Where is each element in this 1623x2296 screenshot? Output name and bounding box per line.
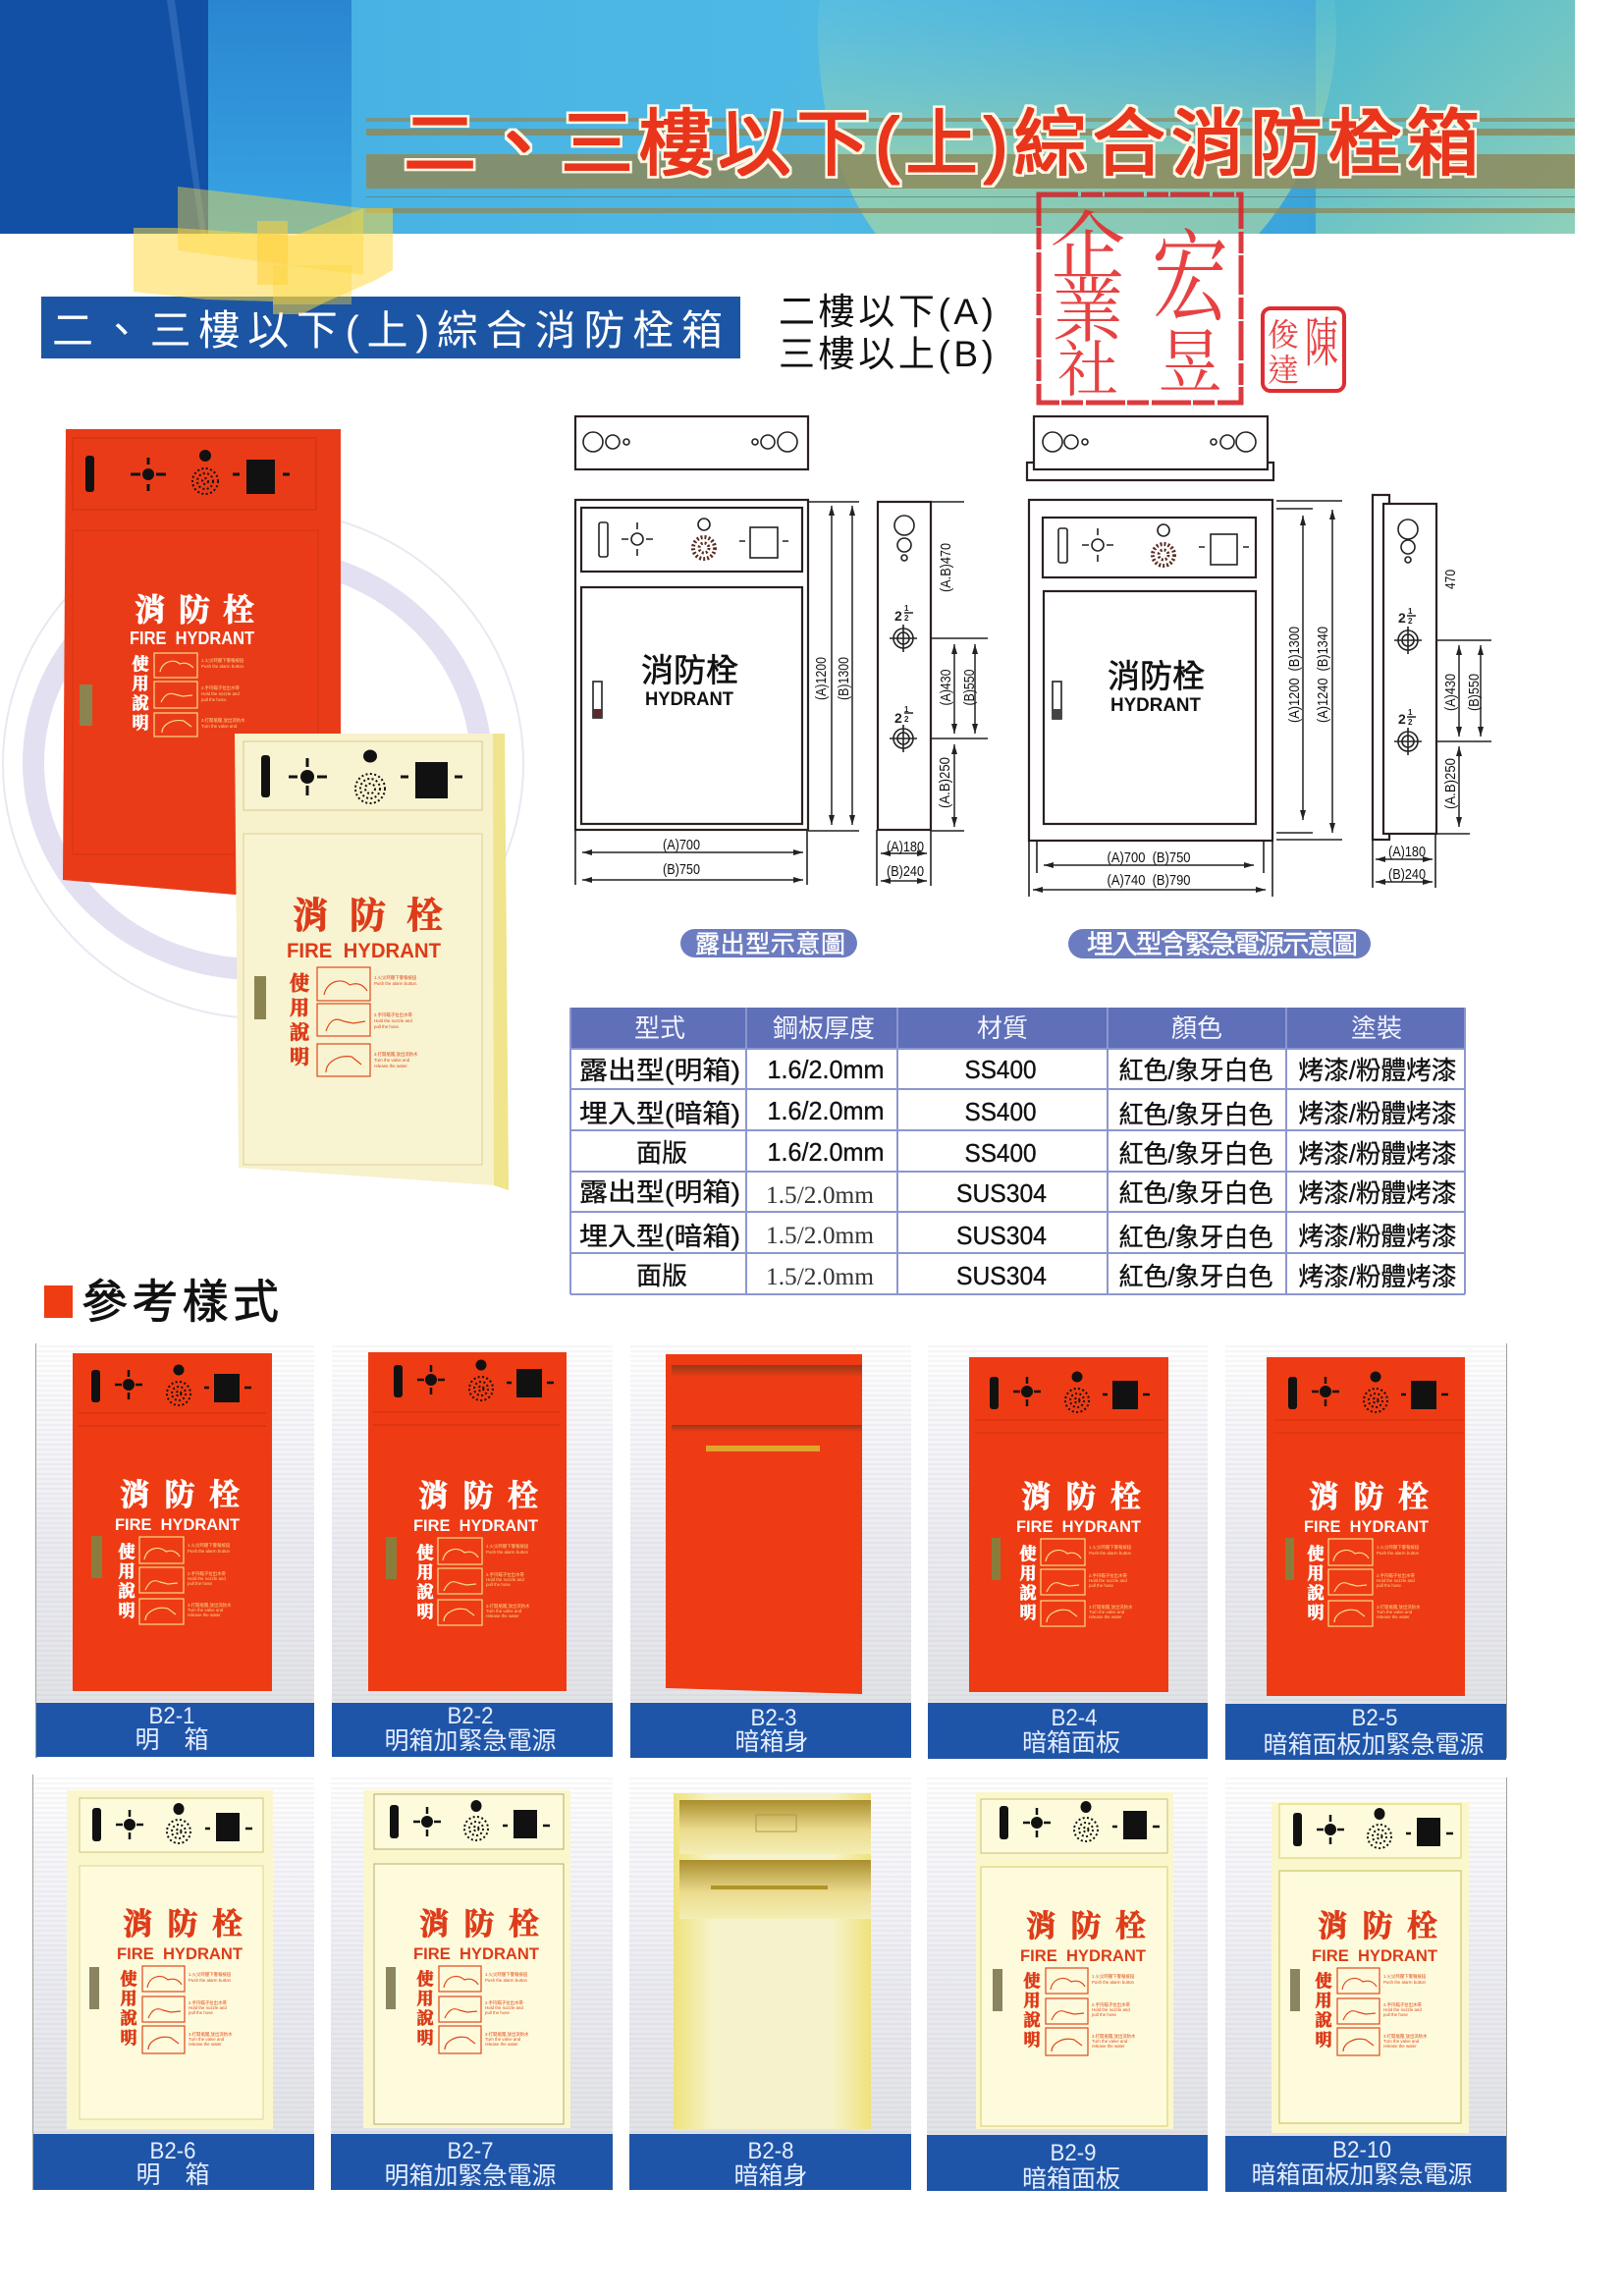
personal seal [1263, 308, 1344, 391]
card B2-7: Push the alarm button [485, 1978, 528, 1983]
card B2-2: B2-2 [448, 1703, 493, 1729]
product photo: red cabinet: 消防栓 [135, 592, 254, 628]
card B2-6: Turn the valve and [189, 2037, 225, 2042]
card B2-7: Hold the nozzle and [485, 2005, 523, 2010]
card B2-7: 消防栓 [419, 1907, 539, 1941]
card B2-2: 2.手持瞄子拉出水帶 [486, 1571, 524, 1578]
table rows: 埋入型(暗箱) [579, 1099, 740, 1128]
company seal: 業 [1053, 273, 1126, 352]
card B2-5: 用 [1308, 1564, 1324, 1583]
card B2-8: 暗箱身 [733, 2162, 808, 2190]
card B2-4: Hold the nozzle and [1089, 1578, 1127, 1583]
card B2-1: release the water [188, 1613, 221, 1617]
card B2-7: Turn the valve and [485, 2037, 521, 2042]
side view: 2 [904, 715, 909, 724]
table rows: 紅色/象牙白色 [1119, 1056, 1272, 1085]
card B2-9: 說 [1023, 2011, 1041, 2030]
card B2-2: 明箱加緊急電源 [384, 1727, 557, 1755]
header band [0, 0, 1575, 234]
side view: 2 [904, 614, 909, 623]
table rows: 紅色/象牙白色 [1119, 1223, 1272, 1252]
company seal: 社 [1057, 338, 1118, 405]
floor legend: 三樓以上(B) [779, 334, 994, 374]
company seal: 企 [1051, 207, 1125, 290]
card B2-9: release the water [1092, 2044, 1125, 2049]
product photo: ivory cabinet: 用 [290, 997, 309, 1019]
personal seal: 陳 [1305, 314, 1338, 373]
card B2-7: 說 [416, 2009, 434, 2028]
side dimensions [877, 502, 988, 886]
floor legend [779, 292, 994, 374]
card B2-6: FIRE HYDRANT [117, 1944, 243, 1963]
card B2-1: 說 [118, 1582, 135, 1601]
product photo: ivory cabinet: 1.火災時壓下警報按鈕 [374, 974, 417, 981]
card B2-5: pull the hose [1377, 1583, 1401, 1588]
side view [1373, 495, 1436, 840]
side dimensions: (A.B)250 [937, 757, 953, 808]
card B2-5: B2-5 [1351, 1705, 1398, 1731]
front dimensions: (A)740 (B)790 [1108, 872, 1190, 889]
card B2-2: 1.火災時壓下警報按鈕 [486, 1543, 529, 1550]
table rows: 露出型(明箱) [579, 1177, 740, 1207]
front view: 消防栓 [1108, 658, 1205, 694]
card B2-2: 消防栓 [418, 1479, 538, 1513]
card B2-5: FIRE HYDRANT [1304, 1517, 1430, 1536]
side dimensions [1373, 570, 1491, 888]
card B2-5: 明 [1308, 1604, 1324, 1622]
product photo: ivory cabinet: 明 [290, 1046, 309, 1068]
side view [878, 502, 931, 830]
card B2-1: 用 [118, 1562, 135, 1581]
front dimensions: (A)1200 [813, 657, 830, 700]
card B2-6: release the water [189, 2042, 222, 2047]
card B2-1: Turn the valve and [188, 1608, 224, 1613]
table rows: 1.6/2.0mm [768, 1137, 884, 1167]
side view: 1 [904, 705, 909, 714]
diagram caption: flush mounted: 埋入型含緊急電源示意圖 [1087, 930, 1358, 959]
card B2-3: B2-3 [750, 1705, 797, 1731]
card B2-9: 1.火災時壓下警報按鈕 [1092, 1973, 1135, 1980]
table rows: 面版 [636, 1261, 687, 1290]
diagram caption: surface mounted: 露出型示意圖 [695, 931, 845, 958]
card B2-7: release the water [485, 2042, 518, 2047]
card B2-4: 3.打開瓶閥,放出消防水 [1089, 1604, 1133, 1611]
card B2-5: 消防栓 [1309, 1480, 1429, 1514]
card B2-4: B2-4 [1051, 1705, 1098, 1731]
card B2-7: pull the hose [485, 2010, 510, 2015]
table rows: 烤漆/粉體烤漆 [1298, 1139, 1457, 1169]
product photo: ivory cabinet: 使 [290, 972, 309, 995]
table header: 顏色 [1171, 1013, 1222, 1043]
table header: 型式 [634, 1013, 685, 1043]
card B2-9: 明 [1023, 2031, 1041, 2050]
table header: 材質 [977, 1013, 1028, 1043]
table rows: 烤漆/粉體烤漆 [1298, 1099, 1457, 1128]
front dimensions: (B)1300 [836, 657, 852, 700]
table rows: 1.5/2.0mm [766, 1264, 875, 1290]
front dimensions [575, 502, 859, 885]
card B2-9: Push the alarm button [1092, 1980, 1135, 1985]
card B2-5: 暗箱面板加緊急電源 [1263, 1731, 1485, 1759]
card B2-10: release the water [1383, 2044, 1417, 2049]
card B2-4: 2.手持瞄子拉出水帶 [1089, 1572, 1127, 1579]
main title: 二、三樓以下(上)綜合消防栓箱 [404, 103, 1480, 185]
product photo: red cabinet: Turn the valve and [201, 724, 238, 729]
card B2-9: pull the hose [1092, 2012, 1116, 2017]
personal seal: 俊 [1268, 317, 1299, 353]
table rows: 紅色/象牙白色 [1119, 1178, 1272, 1208]
card B2-9: 暗箱面板 [1022, 2165, 1120, 2193]
card B2-9: 使 [1023, 1972, 1041, 1991]
card B2-7: B2-7 [448, 2138, 493, 2164]
product photo: ivory cabinet: release the water. [374, 1064, 408, 1068]
card B2-6: pull the hose [189, 2010, 213, 2015]
company seal: 昱 [1159, 324, 1221, 403]
product photo: ivory cabinet: Turn the valve and [374, 1058, 410, 1063]
card B2-7: 使 [416, 1970, 434, 1989]
card B2-4: FIRE HYDRANT [1016, 1517, 1142, 1536]
card B2-4: 1.火災時壓下警報按鈕 [1089, 1544, 1132, 1551]
product photo: red cabinet: 1.火災時壓下警報按鈕 [201, 657, 244, 664]
card B2-1: FIRE HYDRANT [115, 1515, 241, 1534]
card B2-5: 2.手持瞄子拉出水帶 [1377, 1572, 1415, 1579]
card B2-7: 3.打開瓶閥,放出消防水 [485, 2031, 529, 2038]
card B2-4: pull the hose [1089, 1583, 1113, 1588]
card B2-4: Push the alarm button [1089, 1551, 1132, 1556]
card B2-5: Hold the nozzle and [1377, 1578, 1415, 1583]
diagram: surface mounted type [575, 416, 988, 886]
side dimensions: (B)550 [961, 670, 978, 705]
card B2-10: 明 [1316, 2031, 1331, 2050]
product photo: ivory cabinet: 說 [290, 1021, 310, 1044]
product photo: ivory cabinet: Hold the nozzle and [374, 1018, 412, 1023]
table header [570, 1008, 1465, 1049]
background ellipse rings [3, 510, 523, 1018]
side dimensions: (A.B)250 [1442, 758, 1459, 809]
card B2-1: 明 箱 [135, 1726, 209, 1754]
side dimensions: (A)180 [1388, 844, 1426, 860]
decorative yellow overlapping shapes [134, 187, 393, 314]
card B2-6: 使 [120, 1970, 137, 1989]
front dimensions: (A)700 (B)750 [1108, 849, 1190, 866]
card B2-7: 2.手持瞄子拉出水帶 [485, 1999, 523, 2006]
table rows: 1.6/2.0mm [768, 1096, 884, 1125]
side dimensions: (A)430 [1442, 674, 1459, 711]
table header: 鋼板厚度 [773, 1013, 875, 1043]
product photo: ivory cabinet: pull the hose. [374, 1024, 400, 1029]
card B2-5: 使 [1308, 1545, 1324, 1563]
card B2-4: 說 [1019, 1584, 1037, 1603]
card B2-10: B2-10 [1332, 2137, 1391, 2163]
product photo: ivory cabinet [235, 734, 509, 1190]
card B2-2 [332, 1343, 613, 1757]
diagram: flush mounted with emergency power [1027, 416, 1491, 897]
product photo: red cabinet: pull the hose. [201, 697, 227, 702]
side dimensions: (A)430 [938, 670, 954, 705]
floor legend: 二樓以下(A) [779, 292, 994, 332]
front view: 消防栓 [641, 652, 738, 688]
front view [575, 500, 808, 830]
side view: 2 [894, 608, 902, 624]
table rows: 埋入型(暗箱) [579, 1222, 740, 1251]
card B2-10: 1.火災時壓下警報按鈕 [1383, 1973, 1427, 1980]
card B2-10: Push the alarm button [1383, 1980, 1427, 1985]
reference styles heading: 參考樣式 [81, 1276, 279, 1328]
card B2-9: FIRE HYDRANT [1020, 1946, 1147, 1965]
card B2-4: 消防栓 [1021, 1480, 1141, 1514]
side view: 1 [1408, 708, 1413, 717]
card B2-3: 暗箱身 [734, 1728, 809, 1756]
card B2-10 [1225, 1777, 1506, 2192]
card B2-2: 明 [416, 1603, 434, 1621]
card B2-2: 使 [416, 1544, 434, 1562]
card B2-5: Push the alarm button [1377, 1551, 1420, 1556]
card B2-6: 3.打開瓶閥,放出消防水 [189, 2031, 233, 2038]
product photo: red cabinet: Hold the nozzle and [201, 691, 240, 696]
front view: HYDRANT [645, 689, 733, 710]
card B2-5: 1.火災時壓下警報按鈕 [1377, 1544, 1420, 1551]
table rows: SS400 [964, 1097, 1037, 1126]
card B2-1: 消防栓 [120, 1478, 240, 1512]
side view: 2 [894, 710, 902, 726]
card B2-4: 使 [1019, 1545, 1037, 1563]
card B2-10: FIRE HYDRANT [1312, 1946, 1438, 1965]
specification table [570, 1008, 1465, 1294]
card B2-5: 3.打開瓶閥,放出消防水 [1377, 1604, 1421, 1611]
card B2-6: 明 [120, 2029, 137, 2048]
card B2-7: 用 [416, 1990, 434, 2008]
side view: 2 [1408, 718, 1413, 727]
side view: 2 [1398, 711, 1406, 727]
card B2-2: Push the alarm button [486, 1550, 529, 1555]
table rows: SUS304 [956, 1261, 1047, 1290]
side dimensions: (B)240 [887, 863, 924, 880]
card B2-3 [630, 1343, 911, 1758]
card B2-5 [1225, 1343, 1506, 1760]
card B2-4 [928, 1343, 1208, 1759]
product photo: red cabinet: 3.打開瓶閥,放出消防水 [201, 717, 245, 724]
table rows: 烤漆/粉體烤漆 [1298, 1178, 1457, 1208]
card B2-1: 1.火災時壓下警報按鈕 [188, 1542, 231, 1549]
product photo: ivory cabinet: 3.打開瓶閥,放出消防水 [374, 1051, 418, 1058]
product photo: ivory cabinet: FIRE HYDRANT [287, 940, 441, 962]
card B2-6: 用 [120, 1990, 137, 2008]
card B2-4: release the water [1089, 1614, 1122, 1619]
card B2-10: 消防栓 [1318, 1909, 1437, 1943]
product photo: red cabinet: Push the alarm button. [201, 664, 244, 669]
card B2-9: Hold the nozzle and [1092, 2007, 1130, 2012]
section banner: 二、三樓以下(上)綜合消防栓箱 [52, 307, 723, 354]
card B2-1 [36, 1343, 314, 1757]
front view [1029, 500, 1272, 841]
card B2-1: 使 [118, 1543, 135, 1561]
card B2-5: 說 [1308, 1584, 1325, 1603]
card B2-2: 用 [416, 1563, 434, 1582]
card B2-2: pull the hose [486, 1582, 511, 1587]
table rows: 1.5/2.0mm [766, 1182, 875, 1209]
card B2-10: 使 [1316, 1972, 1331, 1991]
card B2-4: 用 [1019, 1564, 1037, 1583]
card B2-7: FIRE HYDRANT [413, 1944, 540, 1963]
card B2-5: release the water [1377, 1614, 1410, 1619]
top view [1027, 416, 1273, 480]
table header: 塗裝 [1351, 1013, 1402, 1043]
card B2-6: 2.手持瞄子拉出水帶 [189, 1999, 227, 2006]
product photo: red cabinet: 使 [132, 655, 149, 674]
front dimensions [1029, 501, 1342, 897]
card B2-10: Turn the valve and [1383, 2039, 1420, 2044]
card B2-4: 明 [1019, 1604, 1037, 1622]
card B2-10: 說 [1316, 2011, 1333, 2030]
product photo: red cabinet [63, 429, 341, 895]
product photo: ivory cabinet: 消防栓 [293, 896, 443, 937]
side dimensions: (A)180 [887, 839, 924, 855]
card B2-7 [331, 1775, 613, 2190]
card B2-4: Turn the valve and [1089, 1610, 1125, 1614]
card B2-9: Turn the valve and [1092, 2039, 1128, 2044]
card B2-6: 消防栓 [123, 1907, 243, 1941]
card B2-2: release the water [486, 1613, 519, 1618]
card B2-2: 3.打開瓶閥,放出消防水 [486, 1603, 530, 1610]
product photo: ivory cabinet: Push the alarm button. [374, 981, 417, 986]
front dimensions: (B)750 [663, 861, 700, 878]
card B2-2: Turn the valve and [486, 1609, 522, 1613]
product photo: red cabinet: 用 [132, 675, 149, 693]
card B2-9 [927, 1775, 1208, 2193]
card B2-9: 3.打開瓶閥,放出消防水 [1092, 2033, 1136, 2040]
table rows: 面版 [636, 1138, 687, 1168]
table rows: 紅色/象牙白色 [1119, 1100, 1272, 1129]
table rows: 烤漆/粉體烤漆 [1298, 1222, 1457, 1251]
card B2-9: B2-9 [1051, 2140, 1096, 2166]
table rows: SS400 [964, 1138, 1037, 1168]
table rows: 紅色/象牙白色 [1119, 1262, 1272, 1291]
table rows: SUS304 [956, 1221, 1047, 1250]
table rows [579, 1055, 1457, 1291]
card B2-7: 明箱加緊急電源 [384, 2162, 557, 2190]
table rows: 1.6/2.0mm [768, 1055, 884, 1084]
front dimensions: (A)1200 (B)1300 [1286, 627, 1303, 723]
side dimensions: (B)240 [1388, 866, 1426, 883]
side dimensions: 470 [1442, 570, 1459, 589]
card B2-2: Hold the nozzle and [486, 1577, 524, 1582]
card B2-10: 3.打開瓶閥,放出消防水 [1383, 2033, 1428, 2040]
card B2-8: B2-8 [748, 2138, 793, 2164]
table rows: 1.5/2.0mm [766, 1223, 875, 1249]
card B2-2: FIRE HYDRANT [413, 1516, 539, 1535]
company seal: 宏 [1152, 223, 1228, 335]
product photo: red cabinet: FIRE HYDRANT [130, 629, 254, 648]
card B2-6: 明 箱 [135, 2161, 210, 2189]
card B2-1: 3.打開瓶閥,放出消防水 [188, 1602, 232, 1609]
table rows: SS400 [964, 1055, 1037, 1084]
card B2-8 [629, 1775, 911, 2190]
table rows: 紅色/象牙白色 [1119, 1139, 1272, 1169]
card B2-1: 2.手持瞄子拉出水帶 [188, 1570, 226, 1577]
company seal [1039, 194, 1241, 405]
front view: HYDRANT [1110, 695, 1201, 716]
card B2-6: 說 [120, 2009, 137, 2028]
table rows: SUS304 [956, 1178, 1047, 1208]
card B2-7: 明 [416, 2029, 434, 2048]
card B2-4: 暗箱面板 [1022, 1729, 1120, 1757]
card B2-1: 明 [118, 1602, 135, 1620]
table rows: 烤漆/粉體烤漆 [1298, 1262, 1457, 1291]
card B2-6: B2-6 [149, 2138, 196, 2164]
table rows: 露出型(明箱) [579, 1056, 740, 1085]
card B2-10: 2.手持瞄子拉出水帶 [1383, 2001, 1422, 2008]
side view: 2 [1398, 610, 1406, 626]
product photo: ivory cabinet: 2.手持瞄子拉出水帶 [374, 1011, 412, 1018]
card B2-6: Push the alarm button [189, 1978, 232, 1983]
card B2-7: 1.火災時壓下警報按鈕 [485, 1971, 528, 1978]
table rows: 烤漆/粉體烤漆 [1298, 1056, 1457, 1085]
product photo: red cabinet: 明 [132, 714, 149, 733]
card B2-1: Hold the nozzle and [188, 1576, 226, 1581]
gallery frame lines [33, 1343, 1506, 2192]
product photo: red cabinet: 2.手持瞄子拉出水帶 [201, 684, 240, 691]
card B2-9: 消防栓 [1026, 1909, 1146, 1943]
card B2-6: 1.火災時壓下警報按鈕 [189, 1971, 232, 1978]
card B2-1: B2-1 [149, 1703, 194, 1729]
side view: 1 [1408, 607, 1413, 616]
side dimensions: (A.B)470 [938, 543, 954, 592]
card B2-2: 說 [416, 1583, 434, 1602]
card B2-10: 用 [1316, 1992, 1331, 2010]
personal seal: 達 [1268, 353, 1299, 388]
card B2-9: 2.手持瞄子拉出水帶 [1092, 2001, 1130, 2008]
front dimensions: (A)1240 (B)1340 [1315, 627, 1331, 723]
side view: 1 [904, 604, 909, 613]
card B2-10: 暗箱面板加緊急電源 [1251, 2161, 1473, 2189]
top view [575, 416, 808, 469]
card B2-1: pull the hose [188, 1581, 212, 1586]
card B2-5: Turn the valve and [1377, 1610, 1413, 1614]
card B2-6 [33, 1775, 314, 2190]
card B2-6: Hold the nozzle and [189, 2005, 227, 2010]
side view: 2 [1408, 617, 1413, 626]
side dimensions: (B)550 [1466, 674, 1483, 711]
card B2-10: Hold the nozzle and [1383, 2007, 1422, 2012]
card B2-1: Push the alarm button [188, 1549, 231, 1554]
card B2-9: 用 [1023, 1992, 1041, 2010]
card B2-10: pull the hose [1383, 2012, 1408, 2017]
front dimensions: (A)700 [663, 837, 700, 853]
product photo: red cabinet: 說 [132, 694, 149, 713]
